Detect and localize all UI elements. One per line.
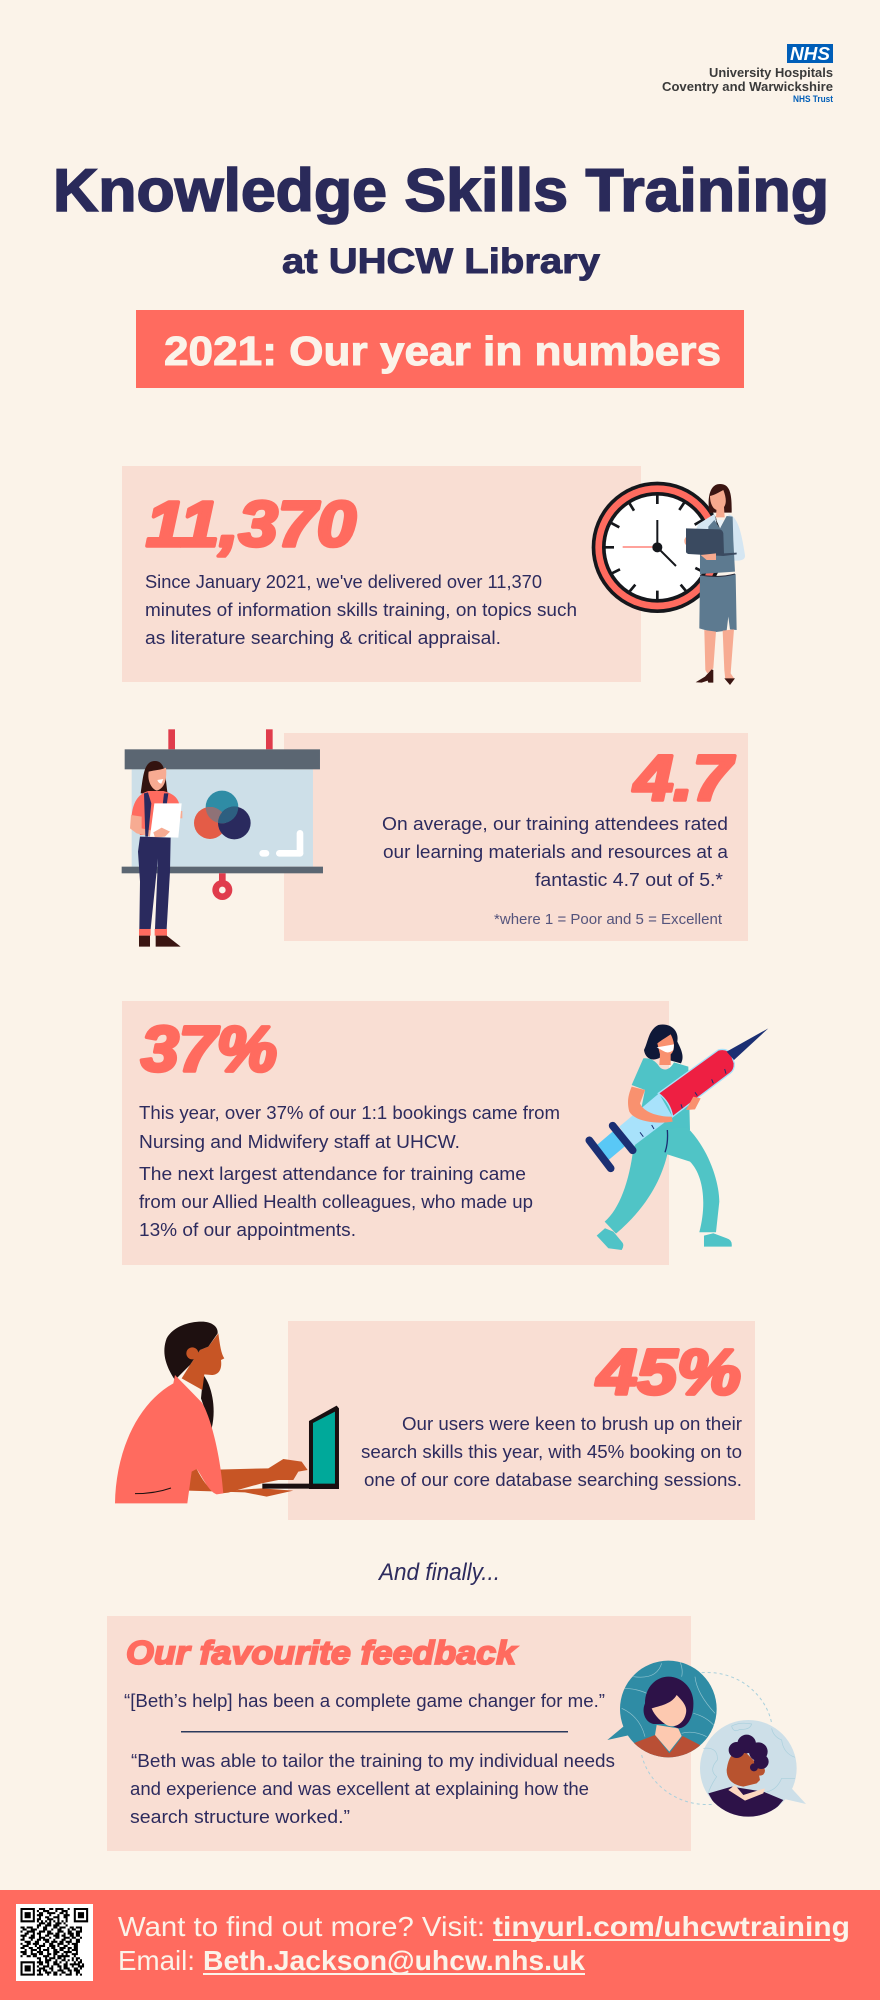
footnote: *where 1 = Poor and 5 = Excellent bbox=[494, 911, 723, 928]
subtitle: at UHCW Library bbox=[282, 242, 601, 281]
text: website link: tinyurl.com/uhcwtraining bbox=[493, 1911, 850, 1942]
text: allied health: 13% of our appointments. bbox=[139, 1220, 356, 1240]
text: email link: Beth.Jackson@uhcw.nhs.uk bbox=[203, 1945, 585, 1976]
icon: laptop bbox=[262, 1406, 339, 1489]
figure: woman with laptop bbox=[684, 484, 745, 685]
text: minutes delivered: minutes of information skills training, on topics such bbox=[145, 600, 577, 620]
text: website link: Want to find out more? Visit: bbox=[118, 1911, 485, 1942]
stat: 11,370: 11,370 bbox=[146, 488, 356, 560]
text: email link: Email: bbox=[118, 1945, 195, 1976]
stat: 45%: 45% bbox=[595, 1336, 741, 1408]
text: nursing and midwifery: Nursing and Midwifery staff at UHCW. bbox=[139, 1132, 460, 1152]
logo: NHS University Hospitals Coventry and Warwickshire bbox=[662, 44, 833, 104]
title: Knowledge Skills Training bbox=[53, 157, 829, 224]
icon: syringe bbox=[589, 1028, 768, 1168]
text: rating description: On average, our training attendees rated bbox=[382, 814, 728, 834]
panel: 45% searching bbox=[288, 1321, 755, 1520]
logo: NHS University Hospitals Coventry and Warwickshire: University Hospitals bbox=[709, 65, 833, 80]
illustration: woman at laptop bbox=[115, 1322, 339, 1503]
panel: favourite feedback bbox=[107, 1616, 691, 1851]
text: database searching sessions: search skills this year, with 45% booking on to bbox=[361, 1442, 742, 1462]
quote: tailor the training: “Beth was able to tailor the training to my individual needs bbox=[131, 1751, 615, 1771]
figure: presenter bbox=[130, 761, 182, 947]
text: database searching sessions: one of our core database searching sessions. bbox=[364, 1470, 742, 1490]
banner: 2021 our year in numbers: 2021: Our year in numbers bbox=[164, 328, 721, 374]
text: and finally: And finally... bbox=[377, 1559, 500, 1586]
illustration: nurse with syringe bbox=[589, 1025, 768, 1250]
icon: man in light blue bubble bbox=[700, 1720, 806, 1820]
illustration: clock and businesswoman bbox=[592, 482, 745, 685]
panel: 11,370 minutes bbox=[122, 466, 641, 682]
illustration: speech bubbles with two people bbox=[607, 1661, 806, 1820]
text: nursing and midwifery: This year, over 37% of our 1:1 bookings came from bbox=[139, 1103, 560, 1123]
text: allied health bbox=[139, 1164, 533, 1240]
footer bar bbox=[0, 1890, 880, 2000]
text: website link bbox=[118, 1911, 850, 1942]
icon: clock bbox=[592, 482, 723, 613]
text: minutes delivered bbox=[145, 572, 577, 648]
heading: our favourite feedback: Our favourite feedback bbox=[126, 1634, 518, 1671]
logo: NHS University Hospitals Coventry and Warwickshire: NHS Trust bbox=[793, 94, 833, 104]
banner: 2021 our year in numbers bbox=[136, 310, 744, 388]
stat: 4.7: 4.7 bbox=[632, 742, 736, 814]
text: nursing and midwifery bbox=[139, 1103, 560, 1152]
quote: tailor the training: and experience and was excellent at explaining how the bbox=[130, 1779, 589, 1799]
figure: nurse arm and hand bbox=[628, 1087, 701, 1123]
icon: woman in teal bubble bbox=[607, 1661, 717, 1763]
text: database searching sessions: Our users were keen to brush up on their bbox=[402, 1414, 742, 1434]
panel: 37% bookings bbox=[122, 1001, 669, 1265]
text: rating description: fantastic 4.7 out of 5.* bbox=[535, 870, 723, 890]
text: rating description: our learning materials and resources at a bbox=[383, 842, 729, 862]
figure: nurse body bbox=[597, 1025, 732, 1250]
illustration: presenter at projector screen bbox=[122, 729, 323, 947]
panel: 4.7 rating bbox=[284, 733, 748, 941]
quote: game changer: “[Beth’s help] has been a complete game changer for me.” bbox=[124, 1691, 605, 1711]
icon: QR code bbox=[16, 1904, 93, 1981]
logo: NHS University Hospitals Coventry and Warwickshire: NHS bbox=[790, 44, 830, 64]
text: database searching sessions bbox=[361, 1414, 742, 1490]
icon: projector screen bbox=[122, 729, 323, 900]
quote: tailor the training: search structure worked.” bbox=[130, 1807, 350, 1827]
stat: 37%: 37% bbox=[141, 1013, 277, 1085]
logo: NHS University Hospitals Coventry and Warwickshire: Coventry and Warwickshire bbox=[662, 79, 833, 94]
text: minutes delivered: as literature searching & critical appraisal. bbox=[145, 628, 501, 648]
text: rating description bbox=[382, 814, 729, 890]
figure: woman bbox=[115, 1322, 308, 1503]
quote: tailor the training bbox=[130, 1751, 615, 1827]
text: allied health: The next largest attendance for training came bbox=[139, 1164, 526, 1184]
text: allied health: from our Allied Health colleagues, who made up bbox=[139, 1192, 533, 1212]
text: minutes delivered: Since January 2021, we've delivered over 11,370 bbox=[145, 572, 542, 592]
